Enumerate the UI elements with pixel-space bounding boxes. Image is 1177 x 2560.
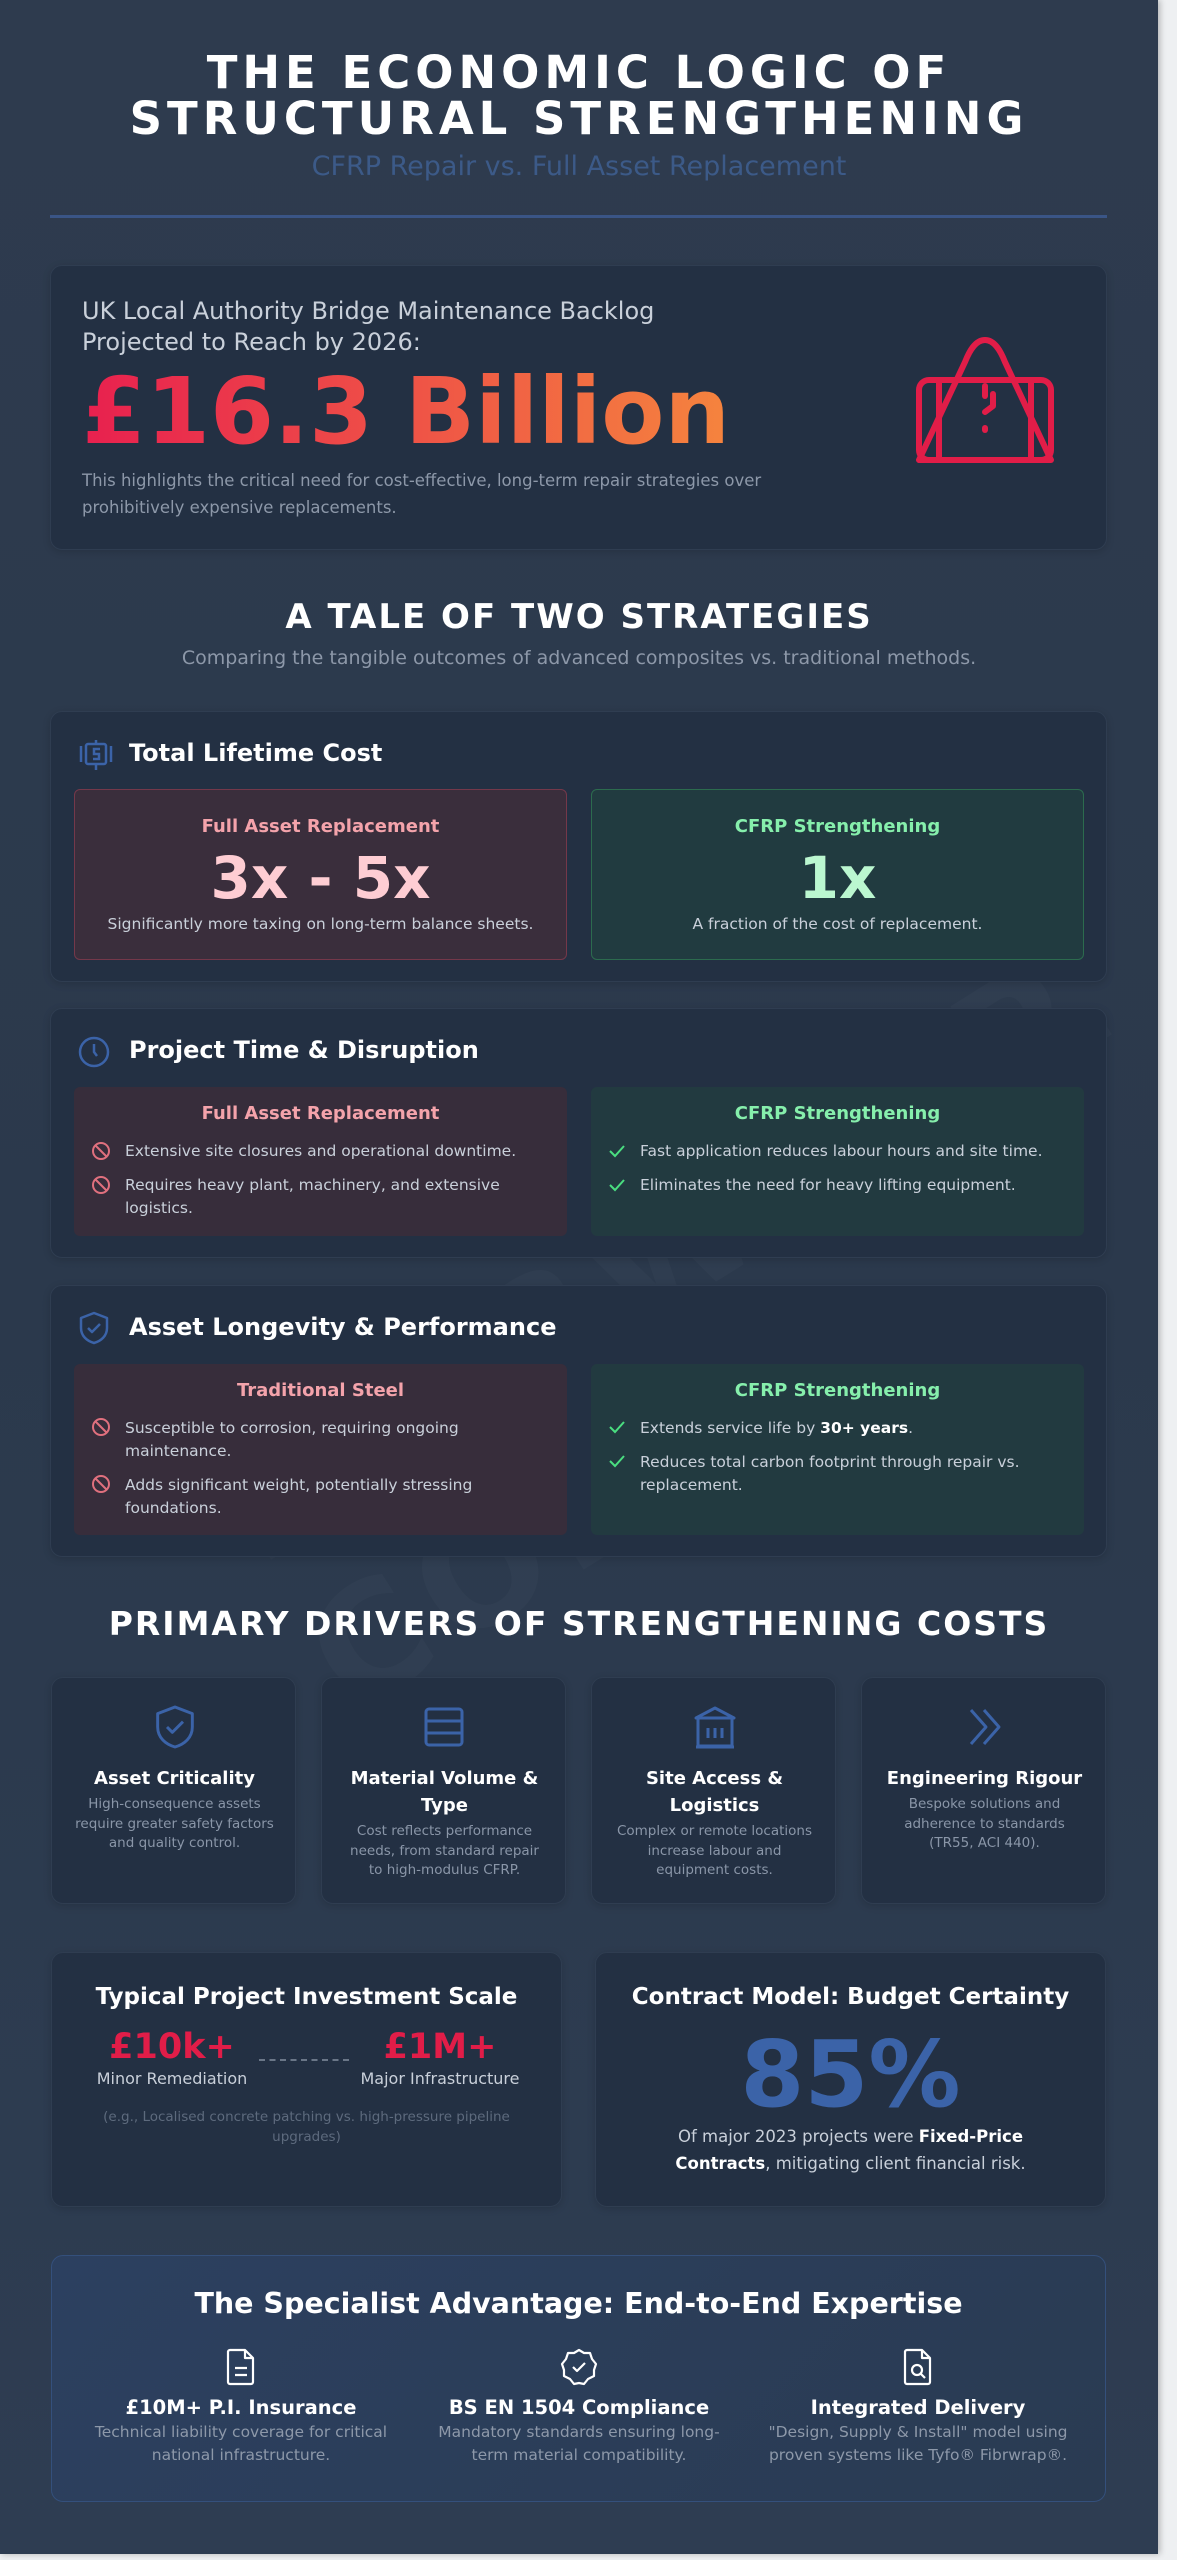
panel: investment scale [51, 1952, 562, 2207]
section heading: primary drivers: PRIMARY DRIVERS OF STRENGTHENING COSTS [109, 1604, 1049, 1643]
section subheading: Comparing the tangible outcomes of advanced composites vs. traditional methods. [182, 647, 976, 669]
box: traditional steel: Traditional Steel [237, 1380, 404, 1401]
panel: specialist advantage [51, 2255, 1106, 2502]
box: CFRP benefits: Eliminates the need for heavy lifting equipment. [640, 1176, 1016, 1194]
icon: shield [80, 1312, 108, 1344]
driver card: site access: Site Access & [646, 1768, 783, 1789]
box: full replacement: Full Asset Replacement [202, 816, 439, 837]
panel: contract model: Of major 2023 projects were Fixed-Price [678, 2127, 1023, 2146]
icon: cost [80, 740, 112, 770]
icon: warning weight [916, 337, 1054, 463]
item: insurance: national infrastructure. [152, 2446, 330, 2464]
panel: asset longevity [50, 1285, 1107, 1557]
item: compliance: BS EN 1504 Compliance [449, 2396, 709, 2419]
driver card: material volume: Type [421, 1795, 468, 1816]
panel: specialist advantage: The Specialist Advantage: End-to-End Expertise [194, 2287, 963, 2320]
watermark: FIBRWRAP. [186, 903, 1154, 1598]
item: compliance [438, 2348, 720, 2464]
hero label: UK Local Authority Bridge Maintenance Backlog [82, 297, 654, 325]
icon: clock [78, 1036, 110, 1068]
hero number: £16.3 Billion [82, 358, 730, 465]
box: CFRP benefits [591, 1087, 1084, 1236]
item: insurance: £10M+ P.I. Insurance [126, 2396, 356, 2419]
item: compliance: term material compatibility. [472, 2446, 686, 2464]
driver card: asset criticality: Asset Criticality [94, 1768, 255, 1789]
item: integrated delivery: "Design, Supply & Install" model using [768, 2423, 1068, 2441]
driver card: material volume: needs, from standard repair [350, 1842, 539, 1858]
driver card: site access [591, 1677, 836, 1904]
hero label [82, 297, 654, 356]
driver card: site access: increase labour and [648, 1842, 781, 1858]
driver card: material volume: to high-modulus CFRP. [369, 1862, 520, 1878]
driver card: asset criticality [51, 1677, 296, 1904]
driver card: site access: Complex or remote locations [617, 1823, 812, 1839]
box: CFRP: A fraction of the cost of replacement. [693, 915, 982, 933]
panel: investment scale: Minor Remediation [97, 2069, 247, 2088]
box: full replacement [74, 789, 567, 960]
box: CFRP benefits: CFRP Strengthening [735, 1103, 940, 1124]
item: integrated delivery: proven systems like Tyfo® Fibrwrap®. [769, 2446, 1067, 2464]
max value: £1M+ [384, 2027, 496, 2067]
box: replacement drawbacks: Requires heavy plant, machinery, and extensive [125, 1176, 500, 1194]
box: CFRP: CFRP Strengthening [735, 816, 940, 837]
heading: Total Lifetime Cost [129, 739, 382, 767]
hero description: prohibitively expensive replacements. [82, 498, 397, 517]
item: insurance: Technical liability coverage for critical [95, 2423, 387, 2441]
driver card: engineering rigour: Bespoke solutions and [909, 1796, 1060, 1812]
hero card: backlog [50, 265, 1107, 550]
note: (e.g., Localised concrete patching vs. high-pressure pipeline [103, 2109, 510, 2125]
driver card: site access: equipment costs. [656, 1862, 773, 1878]
driver card: asset criticality: High-consequence assets [88, 1796, 261, 1812]
box: full replacement: 3x - 5x [210, 844, 430, 912]
big percent: 85% [740, 2021, 961, 2128]
box: replacement drawbacks: logistics. [125, 1199, 193, 1217]
watermark: CO.UK [278, 1285, 870, 1745]
box: traditional steel [74, 1364, 567, 1535]
note: upgrades) [272, 2128, 341, 2144]
hero label: Projected to Reach by 2026: [82, 328, 421, 356]
title: STRUCTURAL STRENGTHENING [130, 92, 1028, 145]
box: traditional steel: foundations. [125, 1499, 222, 1517]
box: traditional steel: Adds significant weight, potentially stressing [125, 1476, 472, 1494]
driver card: material volume: Cost reflects performance [357, 1823, 532, 1839]
list icons (ban / check) [92, 1142, 625, 1493]
driver card: site access: Logistics [670, 1795, 759, 1816]
driver card: asset criticality: require greater safety factors [75, 1816, 274, 1832]
driver card: engineering rigour: (TR55, ACI 440). [929, 1835, 1040, 1851]
panel: investment scale: Major Infrastructure [360, 2069, 520, 2088]
driver card: engineering rigour: Engineering Rigour [887, 1768, 1082, 1789]
driver card: material volume: Material Volume & [351, 1768, 538, 1789]
box: CFRP: 1x [799, 844, 876, 912]
driver card: engineering rigour: adherence to standards [904, 1816, 1065, 1832]
title [130, 46, 1028, 145]
panel: total lifetime cost [50, 711, 1107, 982]
driver card: engineering rigour [861, 1677, 1106, 1904]
heading: Project Time & Disruption [129, 1036, 479, 1064]
panel: investment scale: Typical Project Investment Scale [96, 1984, 517, 2010]
box: CFRP longevity: Extends service life by 30+ years. [640, 1419, 913, 1437]
driver card: asset criticality: and quality control. [109, 1835, 240, 1851]
heading: Asset Longevity & Performance [129, 1313, 556, 1341]
note [103, 2109, 510, 2144]
item: integrated delivery [768, 2348, 1068, 2464]
box: CFRP longevity: CFRP Strengthening [735, 1380, 940, 1401]
box: full replacement: Significantly more taxing on long-term balance sheets. [108, 915, 533, 933]
box: traditional steel: Susceptible to corrosion, requiring ongoing [125, 1419, 459, 1437]
box: CFRP longevity: replacement. [640, 1476, 743, 1494]
hero description [82, 471, 762, 517]
box: replacement drawbacks: Full Asset Replacement [202, 1103, 439, 1124]
box: CFRP longevity [591, 1364, 1084, 1535]
box: replacement drawbacks [74, 1087, 567, 1236]
box: traditional steel: maintenance. [125, 1442, 231, 1460]
driver card: material volume [321, 1677, 566, 1904]
section heading: tale of two strategies: A TALE OF TWO STRATEGIES [285, 597, 873, 637]
min value: £10k+ [109, 2027, 235, 2067]
box: CFRP [591, 789, 1084, 960]
title: THE ECONOMIC LOGIC OF [207, 46, 951, 99]
hero description: This highlights the critical need for cost-effective, long-term repair strategies over [82, 471, 761, 490]
box: replacement drawbacks: Extensive site closures and operational downtime. [125, 1142, 516, 1160]
item: integrated delivery: Integrated Delivery [811, 2396, 1025, 2419]
item: compliance: Mandatory standards ensuring long- [438, 2423, 720, 2441]
box: CFRP longevity: Reduces total carbon footprint through repair vs. [640, 1453, 1020, 1471]
panel: project time & disruption [50, 1008, 1107, 1258]
subtitle: CFRP Repair vs. Full Asset Replacement [312, 151, 846, 182]
panel: contract model [595, 1952, 1106, 2207]
box: CFRP benefits: Fast application reduces labour hours and site time. [640, 1142, 1043, 1160]
item: insurance [94, 2348, 387, 2464]
panel: contract model: Contract Model: Budget Certainty [632, 1984, 1069, 2010]
panel: contract model: Contracts, mitigating client financial risk. [675, 2154, 1026, 2173]
